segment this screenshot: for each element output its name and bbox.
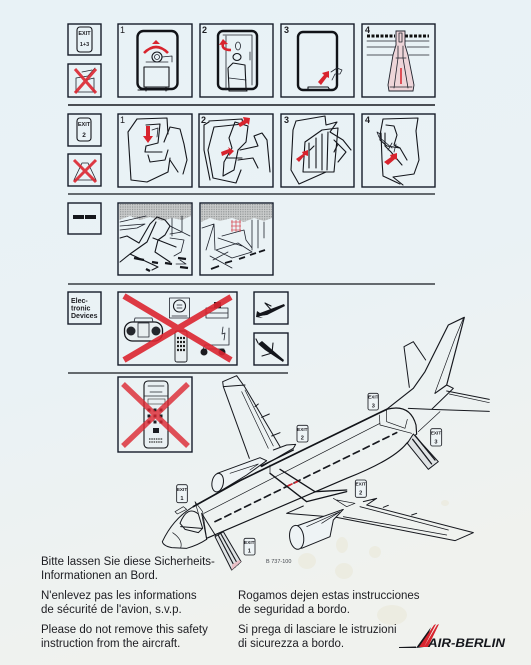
exit sign 3 right: EXIT: [431, 431, 441, 436]
panel: row 1 step 4 slide from above: 4: [365, 25, 370, 35]
panel: row 1 step 2: 2: [202, 25, 207, 35]
panel: electronic devices prohibited: [118, 292, 237, 365]
exit sign 1 upper: 1: [180, 496, 184, 502]
icon: exit 1+3 sign: [68, 24, 101, 55]
right engine: [288, 509, 343, 550]
icon: aircraft landing: [254, 333, 288, 365]
exit sign 1 lower: [244, 538, 255, 555]
exit sign 3 upper: 3: [372, 403, 375, 409]
nose and cockpit: [162, 507, 218, 548]
logo: Air Berlin: [399, 624, 506, 650]
tail fin: [387, 317, 489, 432]
icon: exit 2 sign: 2: [82, 132, 86, 139]
label: electronic devices: Elec-: [71, 298, 88, 305]
rear slide: [407, 434, 438, 469]
left engine: [210, 458, 267, 493]
exit sign 3 upper: EXIT: [368, 395, 379, 400]
exit sign 1 upper: EXIT: [177, 487, 187, 492]
text: Spanish notice: Rogamos dejen estas instrucciones: [238, 590, 420, 602]
left wing: [223, 376, 296, 467]
text: German notice: Informationen an Bord.: [41, 570, 158, 582]
panel: row 2 step 4: [362, 114, 435, 187]
panel: floor path lighting aisle: [200, 203, 273, 275]
exit sign 2 lower: EXIT: [355, 482, 366, 487]
exit sign 2 lower: 2: [359, 491, 362, 497]
label: electronic devices: Devices: [71, 313, 98, 320]
panel: row 2 step 1: [118, 114, 192, 187]
panel: row 2 step 1: 1: [120, 115, 125, 125]
panel: row 1 step 4 slide from above: [362, 24, 435, 97]
overwing exit path: [261, 450, 347, 502]
aircraft type code: B 737-100: [266, 559, 291, 565]
exit sign 3 upper: [368, 393, 379, 410]
text: Spanish notice: de seguridad a bordo.: [238, 604, 350, 616]
panel: row 1 step 1: [118, 24, 192, 97]
icon: exit 1+3 sign: EXIT: [78, 31, 91, 37]
exit sign 2 upper: EXIT: [297, 427, 308, 432]
exit sign 2 upper: 2: [301, 436, 304, 442]
panel: row 1 step 3: [281, 24, 354, 97]
exit sign 2 lower: [355, 480, 366, 497]
panel: row 1 step 1: 1: [120, 25, 125, 35]
text: Italian notice: Si prega di lasciare le istruzioni: [238, 624, 397, 636]
icon: crossed out seat for exit 2: [68, 154, 101, 186]
text: German notice: Bitte lassen Sie diese Sicherheits-: [41, 556, 215, 568]
panel: row 2 step 4: 4: [365, 115, 370, 125]
label: electronic devices: [68, 292, 101, 324]
icon: exit 2 sign: EXIT: [78, 122, 91, 128]
text: English notice: instruction from the aircraft.: [41, 638, 180, 650]
label: electronic devices: tronic: [71, 306, 91, 312]
icon: remote toy controller: [206, 302, 228, 318]
exit sign 1 upper: [177, 485, 187, 503]
front slide: [215, 532, 241, 570]
panel: row 2 step 3: 3: [284, 115, 289, 125]
icon: radio cassette player: [124, 318, 162, 341]
red cross: [124, 296, 231, 360]
aisle path markings: [215, 433, 397, 522]
panel: mobile phone prohibited: [118, 377, 192, 452]
panel: crawling passenger in smoke: [118, 203, 192, 275]
panel: row 2 step 2: [199, 114, 273, 187]
icon: shaver: [170, 298, 190, 318]
text: French notice: N'enlevez pas les informations: [41, 590, 197, 602]
text: French notice: de sécurité de l'avion, s.v.p.: [41, 604, 182, 616]
icon: exit 1+3 sign: 1+3: [80, 42, 89, 48]
right wing: [287, 498, 473, 541]
icon: floor path lights sign: [68, 203, 101, 234]
exit sign 3 right: [431, 429, 442, 446]
exit sign 3 right: 3: [434, 439, 438, 445]
exit sign 2 upper: [297, 425, 308, 442]
exit sign 1 lower: 1: [248, 549, 251, 555]
icon: crossed out seat for exit 1+3: [68, 64, 101, 97]
panel: row 1 step 3: 3: [284, 25, 289, 35]
icon: remote controlled car with lightning: [200, 327, 229, 356]
panel: row 2 step 2: 2: [201, 115, 206, 125]
icon: exit 2 sign: [68, 114, 101, 146]
icon: mobile remote: [175, 331, 187, 362]
exit sign 1 lower: EXIT: [244, 540, 255, 545]
logo: Air Berlin: AIR-BERLIN: [427, 638, 506, 650]
text: English notice: Please do not remove this safety: [41, 624, 208, 636]
panel: row 1 step 2: [200, 24, 273, 97]
icon: aircraft take-off: [254, 292, 288, 324]
fuselage: [193, 408, 417, 538]
panel: row 2 step 3: [281, 114, 354, 187]
aircraft cutaway diagram: [162, 317, 489, 570]
text: Italian notice: di sicurezza a bordo.: [238, 638, 344, 650]
